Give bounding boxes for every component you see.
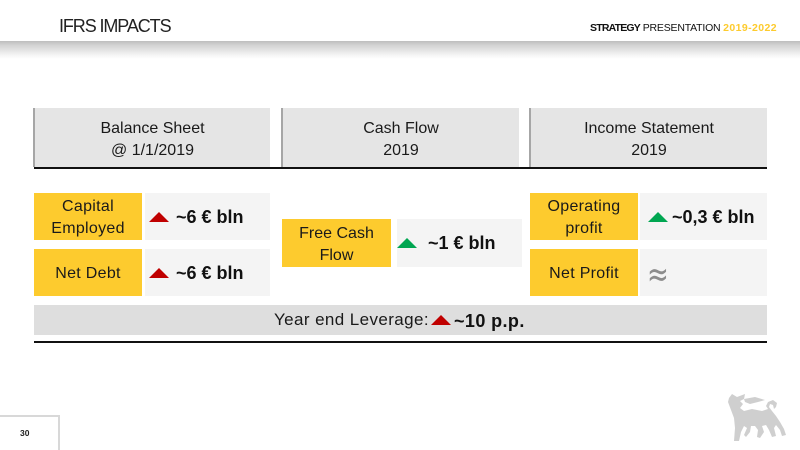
icon: red up triangle [149, 212, 169, 222]
leverage bar [34, 305, 767, 335]
column heading: balance sheet [33, 108, 270, 167]
column heading: cash flow [281, 108, 519, 167]
icon: red up triangle [431, 315, 451, 325]
label: operating profit: Operating [548, 198, 620, 215]
label: net profit [530, 249, 638, 296]
icon: green up triangle [648, 212, 668, 222]
header band shadow [0, 41, 800, 59]
bottom rule [34, 341, 767, 343]
label: free cash flow: Free Cash [299, 224, 374, 242]
label: free cash flow [282, 219, 391, 267]
value panel: capital employed [145, 193, 270, 240]
value: operating profit: ~0,3 € bln [672, 207, 755, 227]
column heading: income statement: 2019 [631, 142, 667, 159]
icon: green up triangle [397, 238, 417, 248]
value panel: free cash flow [397, 219, 522, 267]
value: capital employed: ~6 € bln [176, 207, 244, 227]
label: operating profit: profit [565, 220, 603, 237]
leverage text: Year end Leverage: [274, 310, 429, 329]
label: net debt: Net Debt [55, 265, 121, 282]
column heading: income statement: Income Statement [584, 120, 714, 137]
value: net debt: ~6 € bln [176, 263, 244, 283]
value panel: net debt [145, 249, 270, 296]
label: net profit: Net Profit [549, 265, 619, 282]
value: free cash flow: ~1 € bln [428, 233, 496, 253]
column heading: balance sheet: @ 1/1/2019 [111, 142, 194, 159]
icon: approximately equal: ≈ [647, 255, 669, 295]
label: free cash flow: Flow [320, 246, 353, 264]
presentation tag: STRATEGY PRESENTATION 2019-2022 [590, 22, 777, 34]
column heading: income statement [529, 108, 767, 167]
column heading: balance sheet: Balance Sheet [100, 120, 205, 137]
column heading: cash flow: Cash Flow [363, 120, 439, 137]
column heading: cash flow: 2019 [383, 142, 419, 159]
label: capital employed [34, 193, 142, 240]
leverage value: ~10 p.p. [454, 311, 525, 331]
heading rule [34, 167, 767, 169]
title: IFRS IMPACTS [59, 16, 170, 36]
icon: red up triangle [149, 268, 169, 278]
label: capital employed: Employed [51, 220, 125, 237]
label: net debt [34, 249, 142, 296]
value panel: net profit [640, 249, 767, 296]
label: operating profit [530, 193, 638, 240]
icon: six-legged dog logo [728, 394, 786, 441]
page number: 30 [20, 428, 29, 438]
value panel: operating profit [640, 193, 767, 240]
label: capital employed: Capital [62, 198, 114, 215]
page number box [0, 415, 60, 450]
